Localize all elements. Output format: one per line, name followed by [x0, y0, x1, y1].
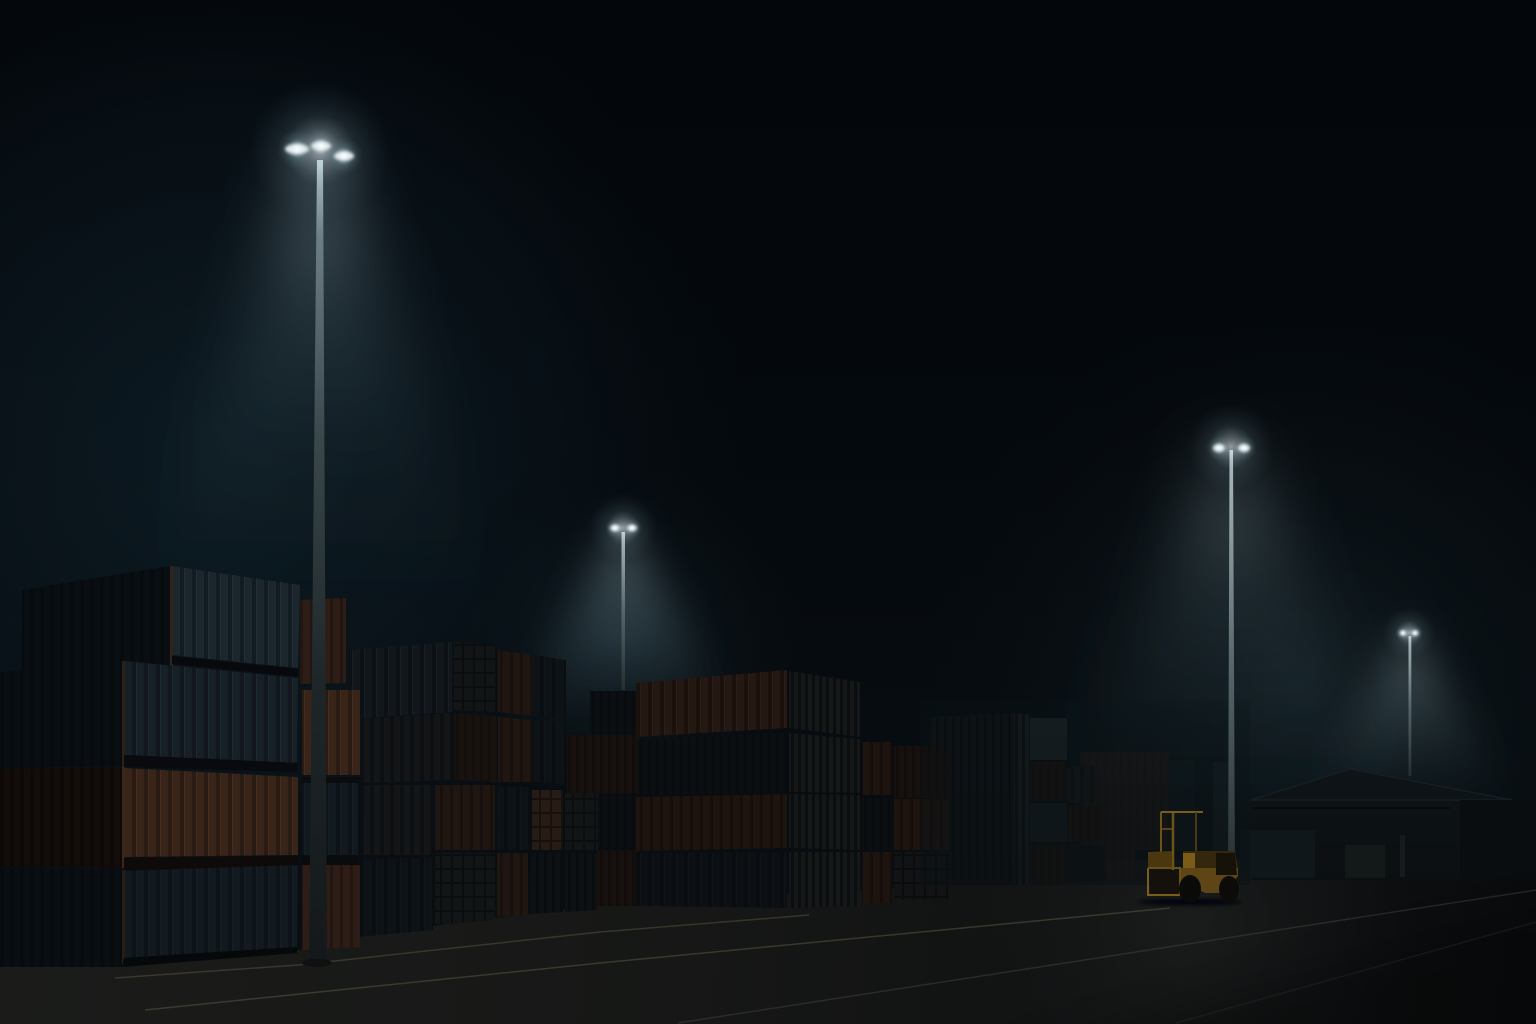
- road markings: [115, 890, 1536, 1023]
- third row orange: [0, 767, 298, 870]
- lamp head 1: [250, 80, 390, 220]
- second row: [0, 661, 298, 772]
- center container stack: [636, 670, 949, 908]
- light pole 2: [622, 532, 625, 690]
- light cones in fog: [130, 145, 1515, 810]
- fog veil over far stacks: [920, 700, 1250, 885]
- top container: [22, 566, 300, 677]
- lamp head 2: [589, 494, 657, 562]
- behind-center stack: [567, 691, 639, 906]
- right container stack: [930, 713, 1105, 885]
- wheels: [1179, 875, 1201, 903]
- lamp head 4: [1383, 607, 1435, 659]
- light pole 4: [1408, 636, 1411, 776]
- lower-right vignette: [1000, 900, 1536, 1024]
- ground: [0, 860, 1536, 1024]
- light pole 1: [302, 160, 332, 967]
- lamp head 3: [1187, 403, 1275, 491]
- mast: [1161, 812, 1203, 880]
- fourth row: [0, 865, 298, 967]
- light pole 3: [1228, 450, 1235, 880]
- forklift: [1138, 812, 1242, 905]
- far containers: [1080, 752, 1230, 880]
- middle container stack: [348, 642, 598, 937]
- body: [1148, 851, 1172, 868]
- warehouse: [1240, 769, 1536, 880]
- lift frame: [1148, 868, 1180, 895]
- side containers: [300, 598, 360, 950]
- left container stack: [0, 566, 360, 967]
